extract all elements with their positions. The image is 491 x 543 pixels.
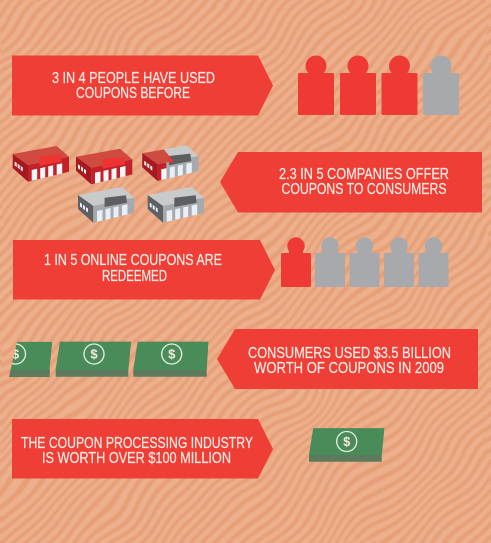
banner text: consumers used	[248, 345, 451, 377]
icons: 5 people, 1 red 4 gray	[281, 237, 448, 287]
banner text: 3 in 4 people	[52, 70, 215, 102]
banner text: 2.3 in 5 companies: 2.3 IN 5 COMPANIES OFFER	[279, 166, 449, 183]
banner: 3 in 4 people	[12, 56, 273, 116]
banner text: 1 in 5 online coupons: REDEEMED	[102, 268, 167, 285]
icons: company buildings, 2.3 of 5 red	[13, 145, 204, 223]
bill 1 (cropped): $	[12, 346, 20, 362]
bill 1 (cropped)	[6, 342, 52, 377]
banner text: 2.3 in 5 companies	[279, 166, 449, 198]
banner text: consumers used: CONSUMERS USED $3.5 BILLION	[248, 345, 451, 362]
banner: 1 in 5 online coupons	[13, 240, 275, 300]
bill 2: $	[90, 346, 98, 362]
banner: 2.3 in 5 companies	[220, 152, 482, 212]
banner text: 3 in 4 people: COUPONS BEFORE	[76, 85, 190, 102]
bill 2	[56, 342, 131, 377]
banner: coupon processing industry	[12, 419, 273, 478]
icon: single green dollar bill: $	[343, 434, 351, 449]
icon: single green dollar bill	[309, 428, 384, 462]
banner text: coupon processing industry: THE COUPON PROCESSING INDUSTRY	[21, 435, 253, 452]
banner text: 1 in 5 online coupons	[44, 252, 222, 285]
bill 3: $	[168, 346, 176, 362]
banner text: 2.3 in 5 companies: COUPONS TO CONSUMERS	[282, 181, 446, 198]
banner text: coupon processing industry	[21, 435, 253, 467]
banner: consumers used $3.5 billion	[217, 329, 478, 389]
banner text: coupon processing industry: IS WORTH OVER $100 MILLION	[42, 450, 231, 467]
banner text: 1 in 5 online coupons: 1 IN 5 ONLINE COUPONS ARE	[44, 252, 222, 269]
icons: 4 people, 3 red 1 gray	[298, 56, 459, 115]
banner text: consumers used: WORTH OF COUPONS IN 2009	[254, 360, 444, 377]
icons: three green dollar bills	[6, 342, 208, 377]
banner text: 3 in 4 people: 3 IN 4 PEOPLE HAVE USED	[52, 70, 215, 87]
bill 3	[133, 342, 208, 377]
